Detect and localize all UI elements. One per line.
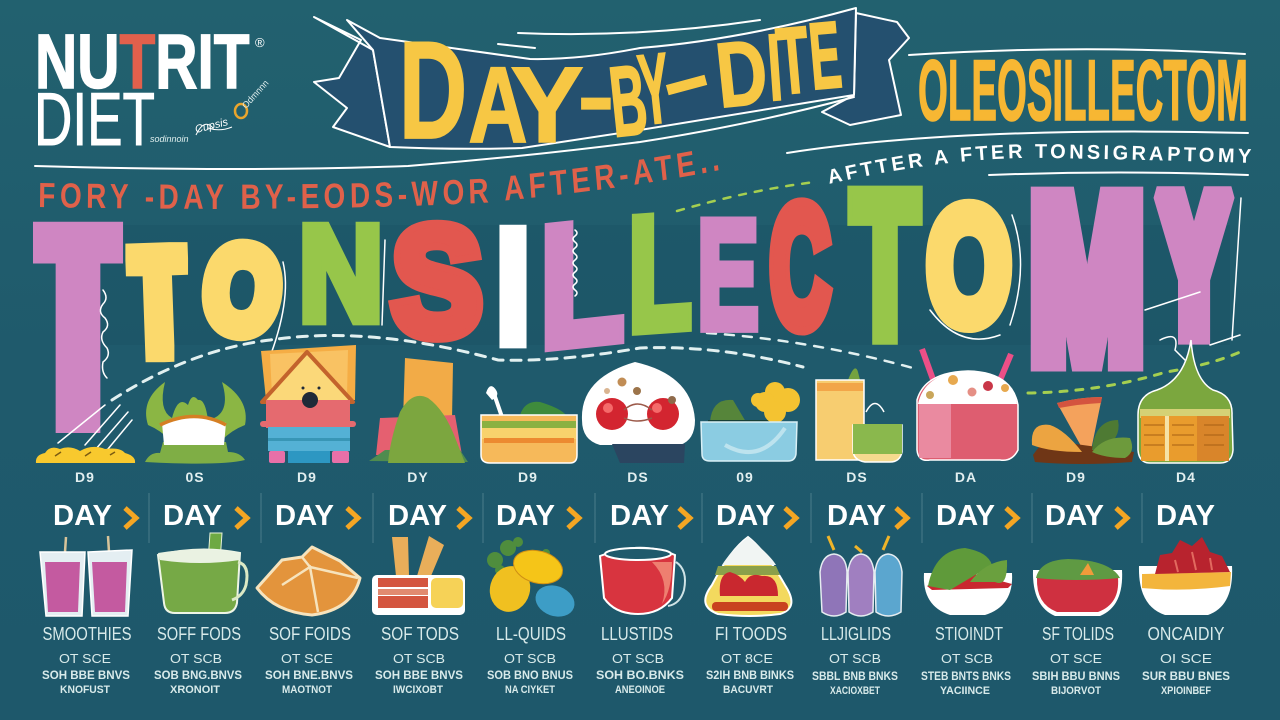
banner headline: DAY-BY-DITE: I [764,15,785,122]
column 2: soff fods: DAY [163,500,222,532]
column 2: soff fods: SOFF FODS [157,624,241,644]
column 8: lljiglids: OT SCB [829,651,881,666]
column 11: oncaidiy [1139,500,1232,697]
column 1: smoothies: SMOOTHIES [42,624,132,644]
column 2: soff fods: OT SCB [170,651,222,666]
banner tails [314,17,390,147]
main title: TTONSILLECTOMY: M [1031,142,1143,417]
column 6: llustids: OT SCB [612,651,664,666]
column 10: sf tolids: OT SCE [1050,651,1102,666]
day 10 food: cone and leaves [1032,397,1134,485]
main title: TTONSILLECTOMY: T [47,163,109,491]
logo: Nutrit Diet: DIET [34,77,155,161]
banner headline: DAY-BY-DITE: Y [634,33,675,146]
day 6 food: white dome with cherries: DS [627,469,649,485]
main title: TTONSILLECTOMY: N [299,198,383,349]
column 2: soff fods [154,500,247,696]
column 8: lljiglids [812,500,907,697]
column 3: sof foids [257,500,360,696]
column 5: liquids: OT SCB [504,651,556,666]
day 1 food: yellow pile [36,447,135,485]
day 6 food: white dome with cherries [582,362,695,485]
column 10: sf tolids [1032,500,1127,697]
main title: TTONSILLECTOMY: C [770,172,830,362]
banner headline: DAY-BY-DITE: A [468,45,528,166]
column 1: smoothies: OT SCE [59,651,111,666]
column 3: sof foids: SOF FOIDS [269,624,351,644]
logo: Nutrit Diet: NUTRIT [35,19,250,105]
column 3: sof foids: SOH BNE.BNVS [265,670,353,682]
column 1: smoothies: SOH BBE BNVS [42,670,130,682]
column 3: sof foids: MAOTNOT [282,684,332,696]
day 9 food: pink smoothie cup [917,349,1018,485]
column 7: fi toods: S2IH BNB BINKS [706,670,794,682]
day 8 food: drinks with green cup [816,368,902,485]
column 2: soff fods: XRONOIT [170,684,220,696]
day 2 food: green hat: 0S [185,469,205,485]
day 4 food: green mound with paper [369,358,468,485]
column 9: stioindt: YACIINCE [940,685,990,697]
column 6: llustids: LLUSTIDS [601,624,673,644]
decorative rules: header lines [35,20,1248,175]
logo: Nutrit Diet: sodinnoin [150,134,189,144]
column 8: lljiglids: DAY [827,500,886,532]
banner ribbon with headline [314,1,909,168]
dashed journey paths [112,182,1240,400]
column 5: liquids: NA CIYKET [505,684,555,696]
day 3 food: character wedge: D9 [297,469,317,485]
logo: Nutrit Diet: ® [255,35,265,50]
column 9: stioindt: STIOINDT [935,624,1003,644]
day columns [40,500,1232,697]
column 4: sof tods: SOH BBE BNVS [375,670,463,682]
column 7: fi toods: FI TOODS [715,624,787,644]
banner headline: DAY-BY-DITE: D [399,13,467,168]
main title: TTONSILLECTOMY: I [494,194,532,380]
column 9: stioindt: STEB BNTS BNKS [921,671,1011,683]
column 7: fi toods [705,500,796,696]
column 3: sof foids: OT SCE [281,651,333,666]
column 1: smoothies: KNOFUST [60,684,110,696]
column 1: smoothies [40,500,136,696]
column dividers [149,493,1142,543]
banner headline: DAY-BY-DITE: E [805,1,845,110]
main title: TTONSILLECTOMY: E [697,189,759,362]
main title: TTONSILLECTOMY: S [392,195,482,367]
logo: Nutrit Diet: Odmnnn [240,78,271,110]
column 10: sf tolids: BIJORVOT [1051,685,1101,697]
column 11: oncaidiy: ONCAIDIY [1148,624,1224,644]
column 5: liquids: DAY [496,500,555,532]
column 6: llustids [596,500,690,696]
column 7: fi toods: DAY [716,500,775,532]
subheading: red strapline: FORY -DAY BY-EODS-WOR AFTER-ATE.. [40,151,718,209]
logo: Nutrit Diet [34,19,271,161]
column 11: oncaidiy: OI SCE [1160,651,1212,666]
day 2 food: green hat [145,382,246,485]
white accent strokes around title [58,198,1241,455]
main title: TTONSILLECTOMY: T [132,219,184,388]
day 3 food: character wedge [260,345,356,485]
column 8: lljiglids: XACIOXBET [830,685,880,697]
banner headline: DAY-BY-DITE: D [711,21,772,128]
day 1 food: yellow pile: D9 [75,469,95,485]
main title: TTONSILLECTOMY [47,142,1228,491]
day 4 food: green mound with paper: DY [407,469,429,485]
main title: TTONSILLECTOMY: Y [1160,149,1228,381]
day 11 food: green and orange jar [1138,340,1233,485]
column 9: stioindt [921,500,1017,697]
column 4: sof tods: OT SCB [393,651,445,666]
column 6: llustids: SOH BO.BNKS [596,670,684,682]
column 11: oncaidiy: DAY [1156,500,1215,532]
day 9 food: pink smoothie cup: DA [955,469,977,485]
main title: TTONSILLECTOMY: L [540,184,624,385]
column 11: oncaidiy: XPIOINBEF [1161,685,1211,697]
column 5: liquids: SOB BNO BNUS [487,670,573,682]
food illustration row [36,340,1233,485]
column 2: soff fods: SOB BNG.BNVS [154,670,242,682]
day 7 food: blue bowl with greens [701,382,800,485]
column 5: liquids [485,500,579,696]
day 5 food: layered bowl: D9 [518,469,538,485]
banner headline: DAY-BY-DITE: - [578,46,614,147]
main title: TTONSILLECTOMY: O [927,175,1011,357]
banner headline: DAY-BY-DITE: B [605,43,652,158]
column 6: llustids: DAY [610,500,669,532]
banner headline: DAY-BY-DITE: T [773,8,814,115]
banner headline: DAY-BY-DITE [399,1,845,168]
column 4: sof tods: DAY [388,500,447,532]
main title: TTONSILLECTOMY: O [198,221,286,361]
column 3: sof foids: DAY [275,500,334,532]
column 9: stioindt: DAY [936,500,995,532]
day 11 food: green and orange jar: D4 [1176,469,1196,485]
subheading: after a fter tonsigraptomy: AFTTER A FTER TONSIGRAPTOMY [830,144,1252,184]
column 10: sf tolids: DAY [1045,500,1104,532]
column 6: llustids: ANEOINOE [615,684,665,696]
column 7: fi toods: OT 8CE [721,651,773,666]
column 8: lljiglids: LLJIGLIDS [821,624,891,644]
column 9: stioindt: OT SCB [941,651,993,666]
banner body [347,8,856,149]
column 11: oncaidiy: SUR BBU BNES [1142,671,1230,683]
banner headline: DAY-BY-DITE: Y [510,45,584,166]
column 10: sf tolids: SF TOLIDS [1042,624,1114,644]
main title: TTONSILLECTOMY: T [851,151,919,381]
column 4: sof tods [372,500,469,696]
column 4: sof tods: IWCIXOBT [393,684,443,696]
column 1: smoothies: DAY [53,500,112,532]
column 7: fi toods: BACUVRT [723,684,773,696]
day 5 food: layered bowl [481,386,577,485]
column 10: sf tolids: SBIH BBU BNNS [1032,671,1120,683]
banner headline: DAY-BY-DITE: - [649,29,721,128]
day 8 food: drinks with green cup: DS [846,469,868,485]
main title: TTONSILLECTOMY: L [629,182,691,365]
column 4: sof tods: SOF TODS [381,624,459,644]
column 5: liquids: LL-QUIDS [496,624,566,644]
column 8: lljiglids: SBBL BNB BNKS [812,671,898,683]
day 10 food: cone and leaves: D9 [1066,469,1086,485]
logo: Nutrit Diet: Cupsis [194,116,230,136]
day 7 food: blue bowl with greens: 09 [736,469,754,485]
